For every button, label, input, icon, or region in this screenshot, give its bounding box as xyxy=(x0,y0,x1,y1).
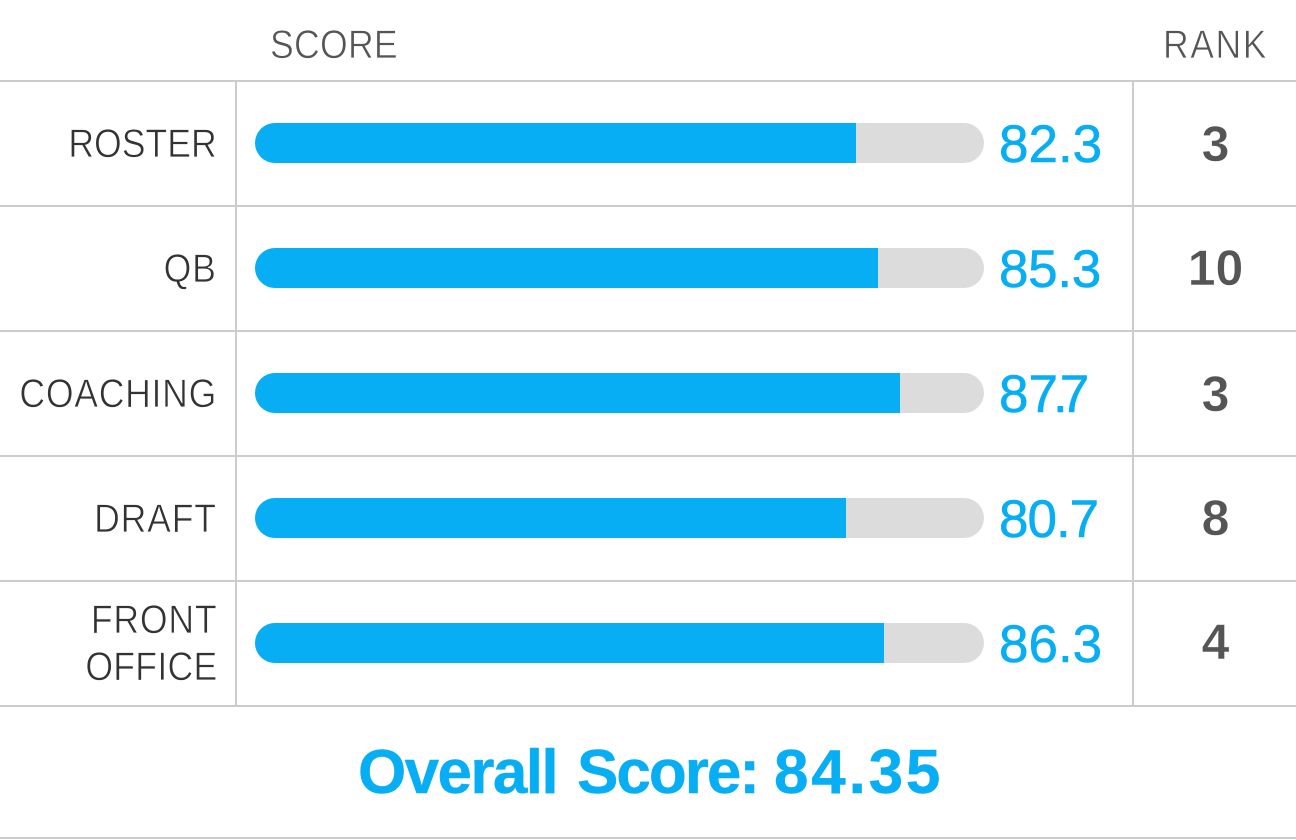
bar: coaching score xyxy=(255,373,984,413)
label: qb: QB xyxy=(164,247,217,291)
rank: qb: 10 xyxy=(1188,240,1243,296)
bar: roster score xyxy=(255,123,984,163)
rank: draft: 8 xyxy=(1202,490,1229,546)
value: front office score: 86.3 xyxy=(999,615,1102,674)
rank: coaching: 3 xyxy=(1202,366,1229,422)
value: roster score: 82.3 xyxy=(999,115,1102,174)
overall score: 84.35 xyxy=(774,738,943,807)
rank: front office: 4 xyxy=(1202,614,1229,670)
overall score xyxy=(358,738,943,807)
label: front office: FRONT xyxy=(90,598,217,642)
heading: score column: SCORE xyxy=(270,23,398,67)
label: coaching: COACHING xyxy=(19,372,217,416)
value: draft score: 80.7 xyxy=(999,490,1098,549)
bar: draft score xyxy=(255,498,984,538)
label: draft: DRAFT xyxy=(94,497,217,541)
label: front office xyxy=(85,598,217,689)
value: qb score: 85.3 xyxy=(999,240,1101,299)
bar: front office score xyxy=(255,623,984,663)
overall score: Overall xyxy=(358,738,557,807)
value: coaching score: 87.7 xyxy=(999,365,1089,424)
overall score: Score: xyxy=(577,738,758,807)
bar: qb score xyxy=(255,248,984,288)
label: roster: ROSTER xyxy=(69,122,217,166)
heading: rank column: RANK xyxy=(1163,23,1268,67)
label: front office: OFFICE xyxy=(85,645,217,689)
rank: roster: 3 xyxy=(1202,116,1229,172)
